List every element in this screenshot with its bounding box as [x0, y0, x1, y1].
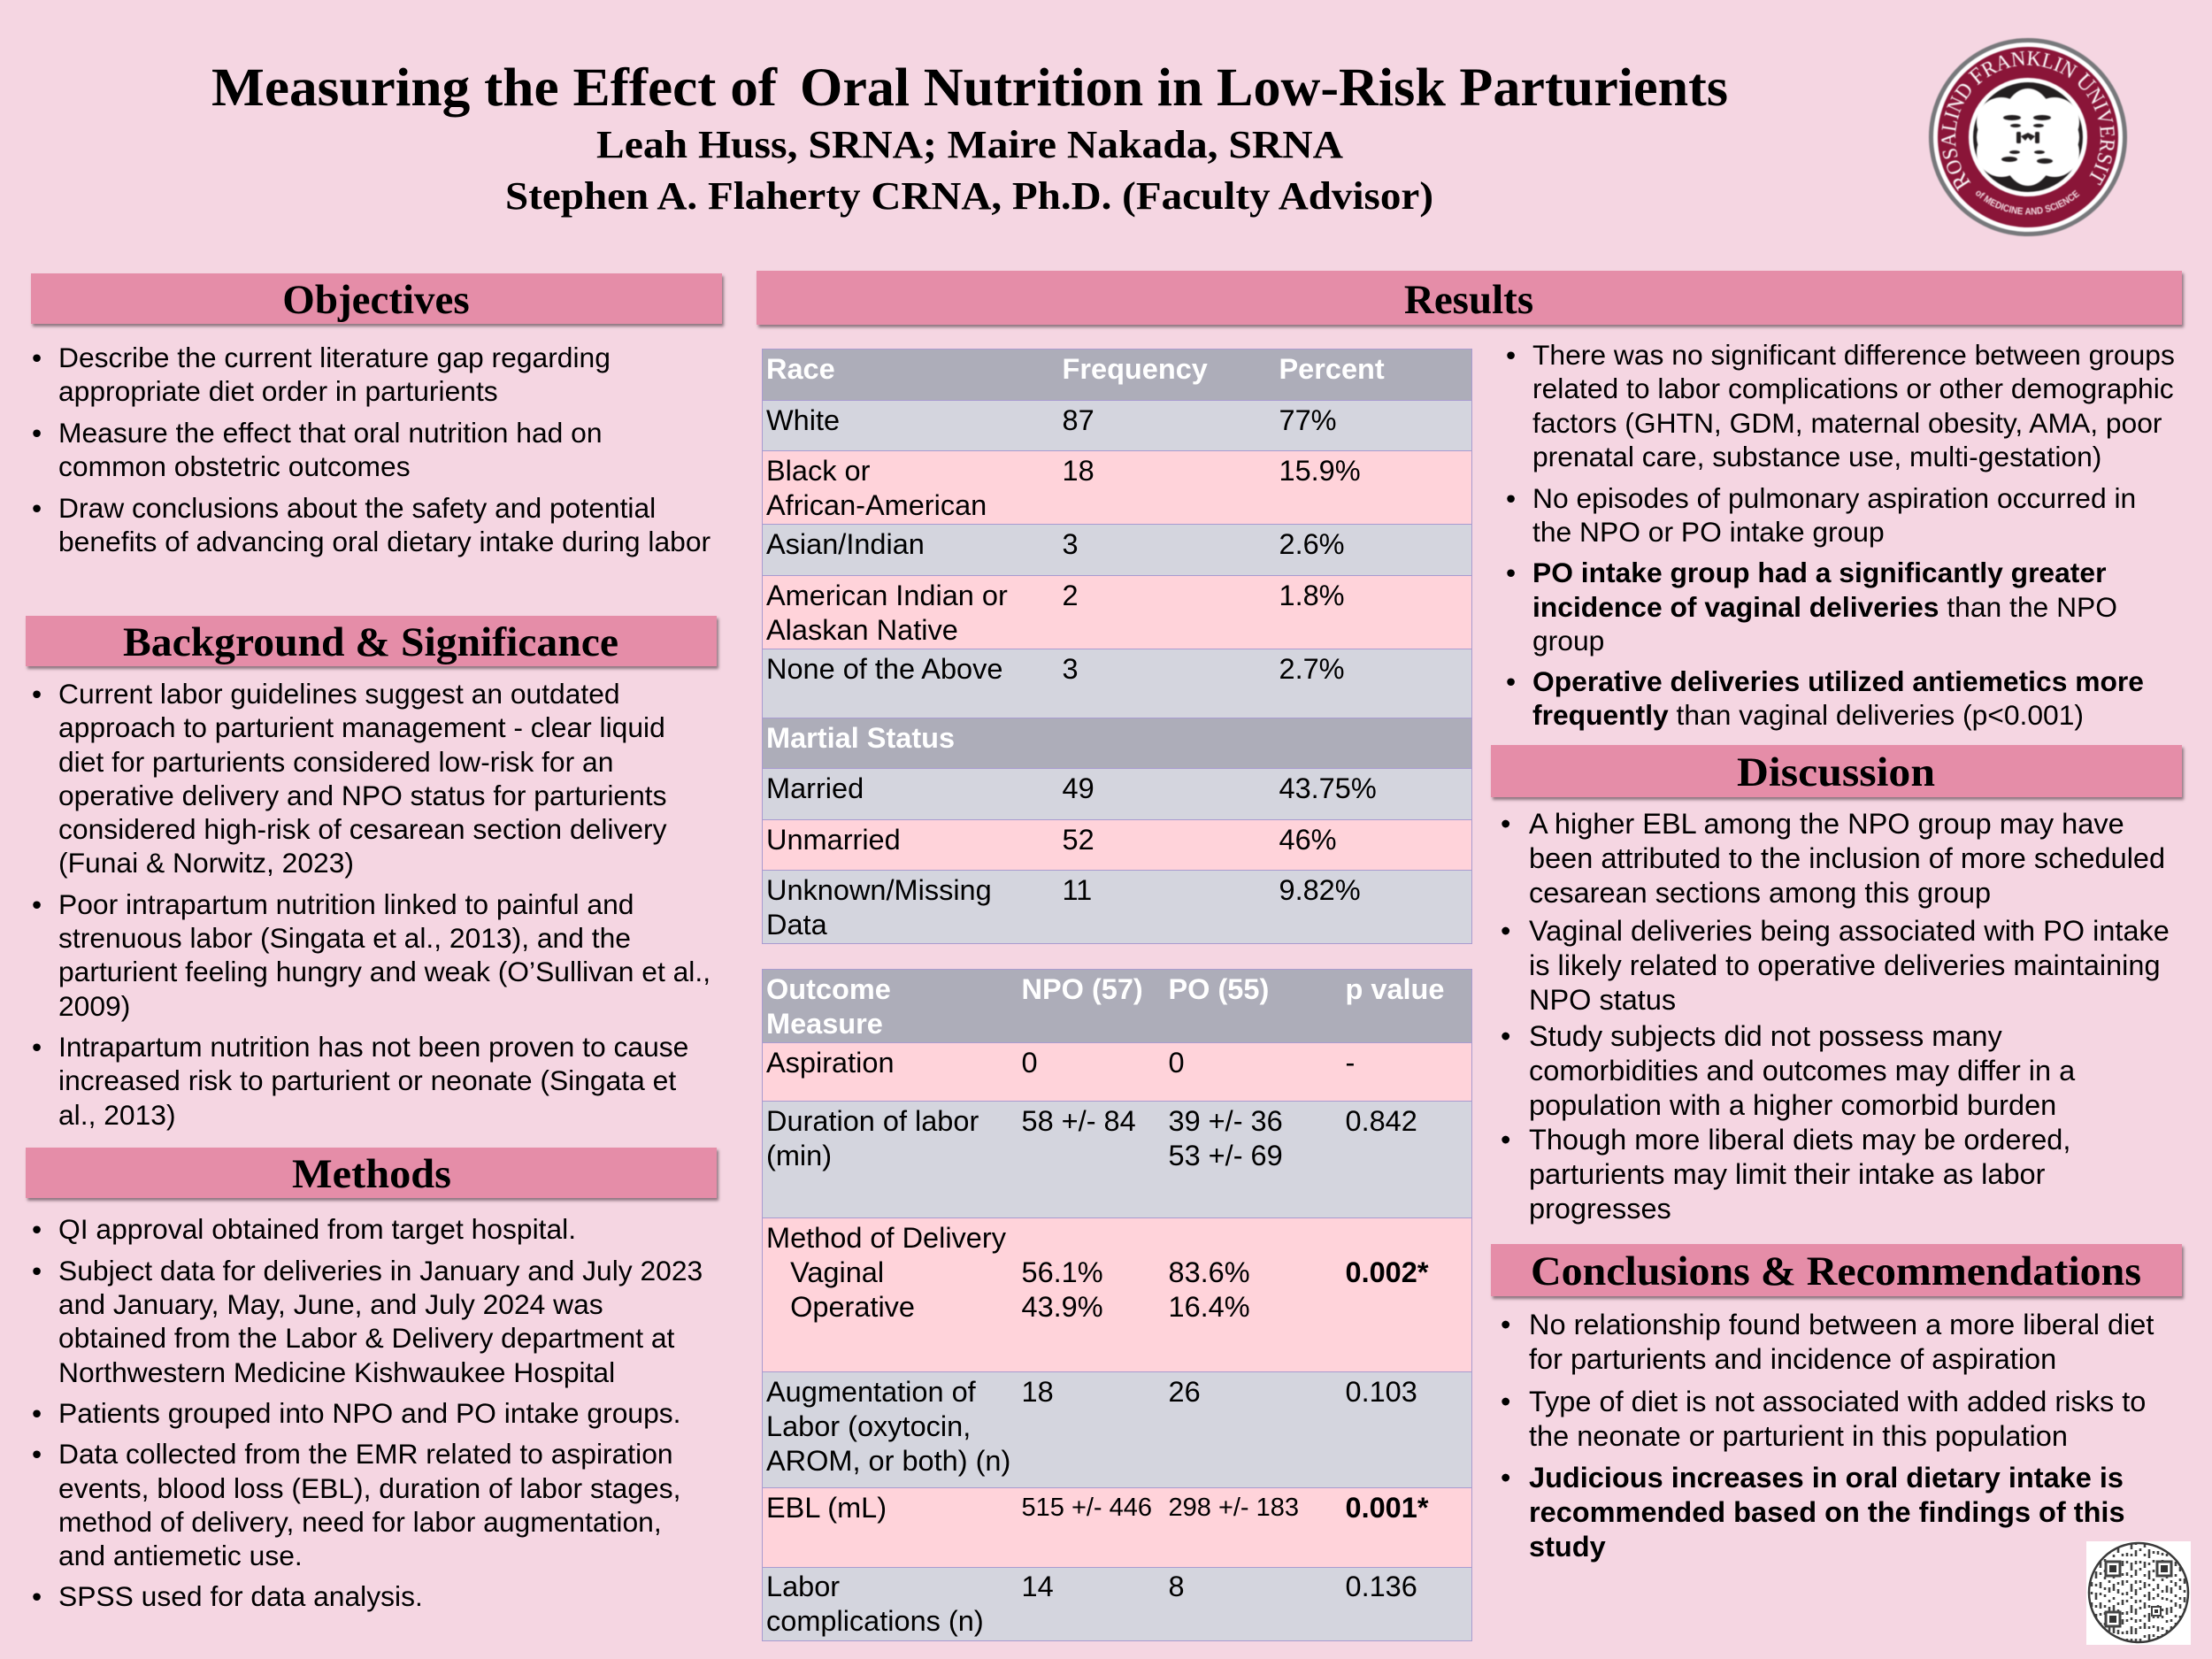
text block: methods list: Patients grouped into NPO and PO intake groups. [58, 1397, 681, 1429]
table: demographics (race and marital status): 9.82% [1279, 874, 1361, 906]
text block: conclusions list: study [1529, 1531, 1606, 1563]
table: demographics (race and marital status): Black or [766, 455, 870, 487]
table: demographics (race and marital status): 77% [1279, 404, 1337, 436]
text block: objectives list: Measure the effect that oral nutrition had on [58, 417, 603, 449]
text block: background list: diet for parturients considered low-risk for an [58, 746, 613, 778]
table: demographics (race and marital status): Percent [1279, 353, 1385, 385]
table: outcome measures: 0 [1168, 1047, 1185, 1079]
text block: conclusions list: Judicious increases in oral dietary intake is [1529, 1462, 2124, 1494]
text block: results findings: No episodes of pulmonary aspiration occurred in [1532, 482, 2136, 514]
table: demographics (race and marital status): African-American [766, 489, 987, 521]
text block: objectives list: appropriate diet order in parturients [58, 375, 498, 407]
text block: background list: (Funai & Norwitz, 2023) [58, 847, 354, 879]
text block: discussion list: A higher EBL among the NPO group may have [1529, 808, 2124, 840]
table: outcome measures: complications (n) [766, 1605, 984, 1637]
text block: conclusions list: the neonate or parturient in this population [1529, 1419, 2068, 1451]
text block: background list: 2009) [58, 990, 130, 1022]
text block: discussion list: parturients may limit their intake as labor [1529, 1157, 2045, 1189]
text block: discussion list: comorbidities and outcomes may differ in a [1529, 1055, 2075, 1087]
text block: discussion list: cesarean sections among this group [1529, 877, 1991, 909]
text block: methods list: Northwestern Medicine Kishwaukee Hospital [58, 1356, 615, 1388]
table: outcome measures: 0.136 [1345, 1571, 1417, 1602]
table: outcome measures: 43.9% [1021, 1291, 1103, 1323]
table: demographics (race and marital status): Unknown/Missing [766, 874, 992, 906]
table: demographics (race and marital status): 3 [1062, 653, 1079, 685]
table: outcome measures: NPO (57) [1021, 973, 1143, 1005]
table: outcome measures: AROM, or both) (n) [766, 1445, 1010, 1477]
table: outcome measures: 58 +/- 84 [1021, 1105, 1136, 1137]
heading: Results: Results [1404, 277, 1533, 323]
table: demographics (race and marital status): Martial Status [766, 722, 955, 754]
text block: discussion list: Though more liberal diets may be ordered, [1529, 1124, 2070, 1156]
text block: methods list [33, 1213, 703, 1612]
text block: methods list: and January, May, June, and July 2024 was [58, 1288, 603, 1320]
text block: results findings: Operative deliveries utilized antiemetics more [1532, 665, 2144, 697]
text block: background list: Poor intrapartum nutrition linked to painful and [58, 888, 634, 920]
table: demographics (race and marital status): 87 [1062, 404, 1094, 436]
table: outcome measures: Measure [766, 1008, 883, 1040]
icon: university seal logo [1928, 37, 2128, 237]
table: outcome measures: Augmentation of [766, 1376, 976, 1408]
text block: conclusions list: recommended based on the findings of this [1529, 1495, 2125, 1527]
table: outcome measures: 53 +/- 69 [1168, 1140, 1283, 1171]
table: outcome measures: 0.103 [1345, 1376, 1417, 1408]
table: demographics (race and marital status): 46% [1279, 824, 1337, 856]
icon: university seal logo: of MEDICINE AND SCIENCE [1975, 189, 2080, 216]
text block: results findings: factors (GHTN, GDM, maternal obesity, AMA, poor [1532, 407, 2162, 439]
heading: Methods: Methods [292, 1151, 451, 1197]
table: outcome measures: 39 +/- 36 [1168, 1105, 1283, 1137]
table: outcome measures: 56.1% [1021, 1256, 1103, 1288]
table: outcome measures: Vaginal [790, 1256, 884, 1288]
text block: results findings [1507, 339, 2175, 731]
heading: Methods [26, 1148, 717, 1198]
text block: results findings: related to labor complications or other demographic [1532, 373, 2174, 404]
text block: results findings: the NPO or PO intake group [1532, 516, 1885, 548]
text block: methods list: events, blood loss (EBL), duration of labor stages, [58, 1472, 680, 1504]
table: outcome measures: 0.842 [1345, 1105, 1417, 1137]
text block: background list: operative delivery and NPO status for parturients [58, 780, 667, 811]
table: outcome measures: PO (55) [1168, 973, 1269, 1005]
table: outcome measures [762, 969, 1472, 1641]
text block: conclusions list: for parturients and incidence of aspiration [1529, 1343, 2056, 1375]
heading: Objectives [31, 273, 722, 324]
title: Oral Nutrition in Low-Risk Parturients [800, 58, 1728, 118]
table: outcome measures: EBL (mL) [766, 1492, 887, 1524]
table: demographics (race and marital status): 11 [1062, 874, 1092, 906]
table: demographics (race and marital status): 18 [1062, 455, 1094, 487]
text block: results findings: group [1532, 625, 1604, 657]
table: outcome measures: p value [1345, 973, 1444, 1005]
table: demographics (race and marital status): 1.8% [1279, 580, 1345, 611]
text block: conclusions list [1502, 1309, 2154, 1563]
authors: Leah Huss, SRNA; Maire Nakada, SRNA [596, 123, 1343, 166]
table: outcome measures: Aspiration [766, 1047, 895, 1079]
text block: discussion list: population with a higher comorbid burden [1529, 1088, 2056, 1120]
text block: background list: parturient feeling hungry and weak (O’Sullivan et al., [58, 956, 710, 987]
icon: circular QR code [2086, 1541, 2191, 1645]
table: outcome measures: 26 [1168, 1376, 1201, 1408]
text block: methods list: method of delivery, need for labor augmentation, [58, 1506, 662, 1538]
text block: results findings: PO intake group had a significantly greater [1532, 557, 2106, 588]
table: demographics (race and marital status): 2 [1062, 580, 1079, 611]
text block: methods list: SPSS used for data analysis. [58, 1580, 423, 1612]
table: demographics (race and marital status): 2.6% [1279, 528, 1345, 560]
faculty advisor: Stephen A. Flaherty CRNA, Ph.D. (Faculty Advisor) [505, 174, 1433, 218]
text block: methods list: Subject data for deliveries in January and July 2023 [58, 1255, 703, 1286]
text block: methods list: obtained from the Labor & Delivery department at [58, 1322, 674, 1354]
text block: discussion list: NPO status [1529, 984, 1676, 1016]
text block: conclusions list: Type of diet is not associated with added risks to [1529, 1386, 2146, 1417]
table: outcome measures: 298 +/- 183 [1168, 1494, 1299, 1522]
heading: Conclusions & Recommendations: Conclusions & Recommendations [1531, 1248, 2141, 1294]
table: outcome measures: (min) [766, 1140, 832, 1171]
table: demographics (race and marital status): Asian/Indian [766, 528, 925, 560]
table: demographics (race and marital status): 49 [1062, 772, 1094, 804]
table: demographics (race and marital status): Frequency [1062, 353, 1208, 385]
text block: discussion list: Study subjects did not possess many [1529, 1019, 2002, 1051]
icon: university seal logo: ROSALIND FRANKLIN UNIVERSITY [1940, 50, 2116, 191]
table: demographics (race and marital status) [762, 349, 1472, 944]
text block: results findings: incidence of vaginal deliveries than the NPO [1532, 591, 2117, 623]
table: demographics (race and marital status): 15.9% [1279, 455, 1361, 487]
table: demographics (race and marital status): Alaskan Native [766, 614, 958, 646]
table: outcome measures: 0.002* [1345, 1256, 1428, 1288]
heading: Results [757, 271, 2182, 325]
text block: discussion list [1502, 808, 2170, 1225]
table: outcome measures: Outcome [766, 973, 891, 1005]
text block: background list: considered high-risk of cesarean section delivery [58, 813, 667, 845]
table: outcome measures: Operative [790, 1291, 915, 1323]
text block: results findings: frequently than vaginal deliveries (p<0.001) [1532, 699, 2084, 731]
table: demographics (race and marital status): 43.75% [1279, 772, 1377, 804]
text block: methods list: Data collected from the EMR related to aspiration [58, 1438, 673, 1470]
table: outcome measures: Labor [766, 1571, 840, 1602]
heading: Objectives: Objectives [282, 277, 470, 323]
table: demographics (race and marital status): 52 [1062, 824, 1094, 856]
table: outcome measures: Labor (oxytocin, [766, 1410, 971, 1442]
text block: background list: strenuous labor (Singata et al., 2013), and the [58, 922, 631, 954]
table: demographics (race and marital status): None of the Above [766, 653, 1002, 685]
table: demographics (race and marital status): Race [766, 353, 835, 385]
table: demographics (race and marital status): American Indian or [766, 580, 1008, 611]
text block: discussion list: progresses [1529, 1193, 1671, 1225]
table: outcome measures: 0.001* [1345, 1492, 1428, 1524]
text block: discussion list: is likely related to operative deliveries maintaining [1529, 949, 2161, 981]
heading: Background & Significance: Background & Significance [123, 619, 618, 665]
text block: objectives list [33, 342, 710, 557]
text block: methods list: QI approval obtained from target hospital. [58, 1213, 576, 1245]
text block: objectives list: common obstetric outcomes [58, 450, 411, 482]
text block: background list: approach to parturient management - clear liquid [58, 711, 665, 743]
table: demographics (race and marital status): White [766, 404, 840, 436]
text block: background list: Current labor guidelines suggest an outdated [58, 678, 620, 710]
text block: background list [33, 678, 710, 1131]
table: outcome measures: 14 [1021, 1571, 1054, 1602]
text block: discussion list: been attributed to the inclusion of more scheduled [1529, 842, 2165, 874]
title: Measuring the Effect of [211, 58, 778, 118]
text block: methods list: and antiemetic use. [58, 1540, 303, 1571]
table: outcome measures: Duration of labor [766, 1105, 979, 1137]
table: outcome measures: 16.4% [1168, 1291, 1250, 1323]
table: outcome measures: - [1345, 1047, 1355, 1079]
table: outcome measures: 515 +/- 446 [1021, 1494, 1152, 1522]
text block: results findings: There was no significant difference between groups [1532, 339, 2175, 371]
text block: objectives list: Draw conclusions about the safety and potential [58, 492, 656, 524]
table: outcome measures: 18 [1021, 1376, 1054, 1408]
table: outcome measures: Method of Delivery [766, 1222, 1006, 1254]
table: demographics (race and marital status): 3 [1062, 528, 1079, 560]
table: demographics (race and marital status): Unmarried [766, 824, 901, 856]
table: demographics (race and marital status): Married [766, 772, 864, 804]
text block: objectives list: benefits of advancing oral dietary intake during labor [58, 526, 710, 557]
heading: Discussion: Discussion [1737, 749, 1935, 795]
title block [211, 58, 1728, 218]
heading: Background & Significance [26, 616, 717, 666]
table: demographics (race and marital status): Data [766, 909, 827, 941]
text block: background list: increased risk to parturient or neonate (Singata et [58, 1064, 676, 1096]
table: outcome measures: 8 [1168, 1571, 1185, 1602]
text block: objectives list: Describe the current literature gap regarding [58, 342, 611, 373]
text block: background list: al., 2013) [58, 1099, 176, 1131]
table: outcome measures: 83.6% [1168, 1256, 1250, 1288]
text block: background list: Intrapartum nutrition has not been proven to cause [58, 1031, 688, 1063]
table: demographics (race and marital status): 2.7% [1279, 653, 1345, 685]
table: outcome measures: 0 [1021, 1047, 1038, 1079]
heading: Discussion [1491, 745, 2182, 797]
text block: conclusions list: No relationship found between a more liberal diet [1529, 1309, 2154, 1340]
text block: discussion list: Vaginal deliveries being associated with PO intake [1529, 915, 2170, 947]
text block: results findings: prenatal care, substance use, multi-gestation) [1532, 441, 2101, 472]
